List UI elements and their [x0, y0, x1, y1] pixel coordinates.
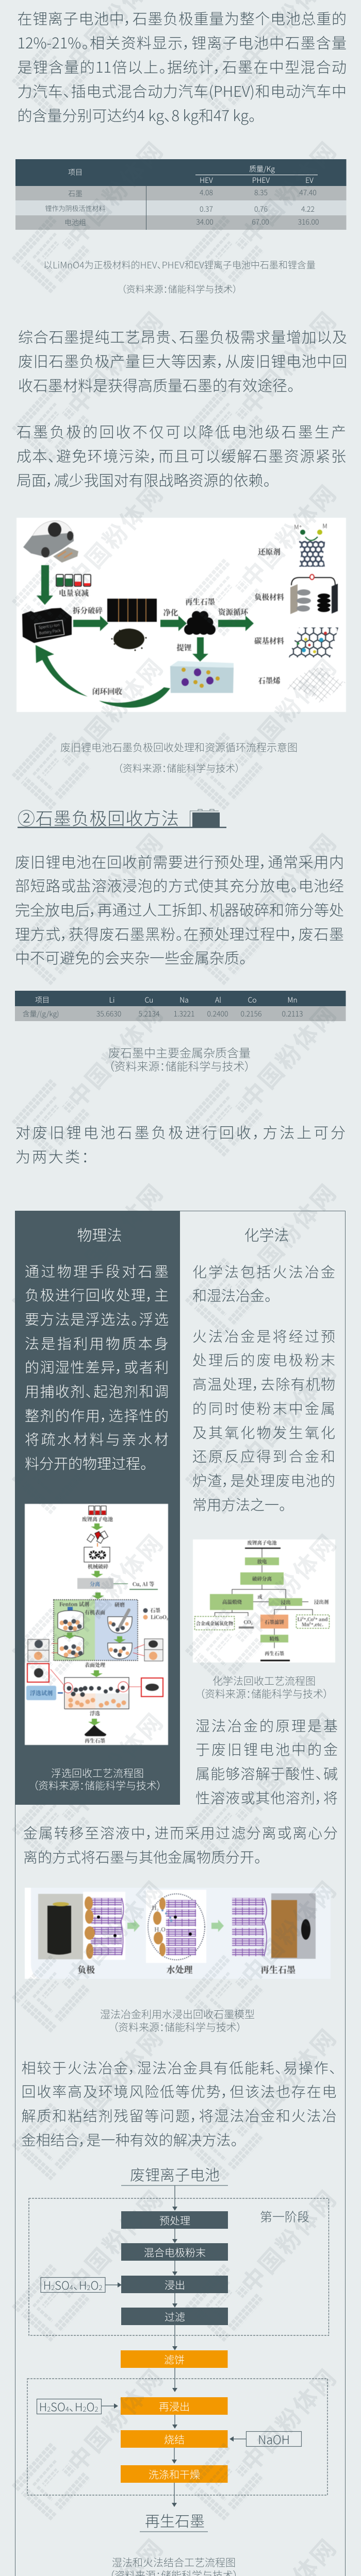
input: acid reagents: O	[90, 2277, 99, 2293]
text block: graphite content intro	[18, 7, 347, 126]
caption: table 1: （资料来源：储能科学与技术）	[122, 282, 237, 296]
step: pretreatment: 预处理	[159, 2212, 190, 2228]
diagram: regenerated graphite stacks	[232, 1898, 267, 1956]
text block: comparison of methods: 金相结合，是一种有效的解决方法。	[22, 2129, 238, 2150]
heading: physical method: 物理法	[77, 1224, 122, 1245]
input: sodium hydroxide: NaOH	[258, 2430, 290, 2448]
input: acid reagents: H	[43, 2277, 51, 2293]
arrow	[127, 1920, 140, 1932]
figure: anode recycling and resource cycle flow	[17, 518, 346, 712]
step: filter cake: 滤饼	[164, 2351, 185, 2367]
label: mechanical crushing: 机械破碎	[88, 1562, 109, 1570]
image: copper foil and graphite powder photo	[271, 1893, 316, 1959]
output: alloy	[195, 1617, 234, 1630]
text: 中国粉体网	[233, 476, 344, 594]
table: graphite and lithium mass by vehicle type: 电池组	[64, 217, 86, 228]
arrow	[92, 1592, 104, 1599]
panel: stage two	[27, 2379, 327, 2495]
legend	[143, 1606, 168, 1621]
label: reductant with icon: 还原剂	[258, 546, 281, 557]
caption: combined process figure	[109, 2554, 238, 2576]
step: flotation reagent: 浮选试剂	[30, 1689, 53, 1697]
table: graphite and lithium mass by vehicle type: 0.76	[254, 204, 268, 214]
caption: figure 1: （资料来源：储能科学与技术）	[118, 761, 240, 775]
caption: table 1	[43, 258, 316, 296]
step: flotation reagent	[26, 1686, 63, 1700]
panel: surface treatment: Fenton 试剂	[59, 1600, 89, 1607]
input: acid reagents	[41, 2277, 105, 2293]
figure: chemical recycling flow	[193, 1539, 335, 1663]
output: copper and aluminium: Cu，Al 等	[133, 1580, 154, 1588]
text: 中国粉体网	[59, 1704, 171, 1822]
text block: recycling benefits: 成本、避免环境污染，而且可以缓解石墨资源紧张	[17, 444, 346, 466]
text: 中国粉体网	[233, 302, 344, 421]
step: sintering	[121, 2430, 228, 2448]
step: re-leaching: 再浸出	[159, 2399, 190, 2413]
input: acid reagents: 2	[87, 2282, 91, 2292]
text block: comprehensive factors: 废旧石墨负极产量巨大等因素，从废旧锂电池中回	[18, 349, 347, 371]
text block: recycling benefits: 局面，减少我国对有限战略资源的依赖。	[17, 469, 271, 490]
arrow	[90, 1670, 103, 1677]
text: 中国粉体网	[59, 1872, 171, 1990]
text block: pyrometallurgy: 常用方法之一。	[192, 1494, 286, 1515]
detail: floated particle right	[129, 1678, 163, 1697]
text: 中国粉体网	[59, 1525, 171, 1643]
step: washing and drying	[121, 2465, 228, 2483]
panel: surface treatment: 有机表面	[85, 1608, 105, 1616]
input: acid reagents again: O	[86, 2398, 94, 2415]
arrow	[211, 1920, 224, 1932]
label: closed-loop recycling: 闭环回收	[92, 686, 122, 697]
diagram: water treatment	[146, 1890, 206, 1963]
output: carbon dioxide	[239, 1618, 254, 1628]
icon: spent battery pack: Spent Li-Ion	[38, 622, 60, 631]
step: spent lithium-ion battery: 废锂离子电池	[130, 2163, 220, 2185]
caption: water leaching figure: （资料来源：储能科学与技术）	[113, 2019, 242, 2034]
text block: pretreatment: 完全放电后，再通过人工拆卸、机器破碎和筛分等处	[15, 899, 344, 920]
icon: graphite pile	[85, 1725, 106, 1736]
text: 中国粉体网	[59, 1353, 171, 1472]
text: 中国粉体网	[233, 1525, 344, 1643]
step: regenerated graphite: 再生石墨	[145, 2510, 205, 2531]
label: graphene with sheet icon: 石墨烯	[258, 675, 281, 686]
table: metal impurities in spent graphite: 0.2400	[207, 1009, 228, 1019]
table: metal impurities in spent graphite: Mn	[287, 995, 298, 1005]
text: 中国粉体网	[233, 132, 344, 251]
text block: physical method description	[25, 1260, 169, 1473]
table: graphite and lithium mass by vehicle type: 67.00	[252, 217, 269, 227]
icon: heading battery and rule	[18, 809, 226, 828]
caption: flotation figure	[33, 1765, 162, 1792]
step: refining	[260, 1635, 288, 1642]
arrow: car to spent battery	[37, 565, 53, 605]
legend: LiCoO₂	[151, 1613, 168, 1621]
table: graphite and lithium mass by vehicle type: 4.08	[200, 188, 213, 198]
step: pretreatment	[121, 2211, 228, 2229]
arrow: closed loop	[36, 645, 170, 708]
arrow	[88, 1719, 101, 1725]
connectors	[102, 2185, 246, 2503]
input: acid reagents again: SO	[51, 2398, 65, 2415]
legend: 石墨	[150, 1606, 161, 1614]
text block: graphite content intro: 在锂离子电池中，石墨负极重量为整个电池总重的	[18, 7, 347, 29]
input: acid reagents again: 2	[94, 2404, 98, 2413]
text block: hydrometallurgy continued: 金属转移至溶液中，进而采用过滤分离或离心分	[23, 1822, 338, 1842]
diagram: water treatment: H₂	[152, 1904, 159, 1912]
text: 中国粉体网	[59, 2020, 171, 2138]
text block: pretreatment	[15, 850, 344, 968]
text block: hydrometallurgy principle: 湿法冶金的原理是基	[195, 1715, 338, 1735]
caption: chemical figure: 化学法回收工艺流程图	[212, 1673, 316, 1688]
label: carbon material with mesh icon: 碳基材料	[254, 636, 284, 646]
caption: table 2	[108, 1043, 251, 1074]
arrow: lithium extraction	[192, 637, 208, 662]
icon: spent batteries	[89, 1506, 106, 1515]
step: graphite filter cake: 石墨滤饼	[265, 1618, 284, 1625]
text: 中国粉体网	[59, 1175, 171, 1293]
table: graphite and lithium mass by vehicle type: PHEV	[252, 175, 270, 185]
label: flotation: 浮选	[90, 1709, 100, 1717]
text block: pyrometallurgy	[192, 1325, 335, 1515]
caption: figure 1	[60, 739, 298, 775]
text: 中国粉体网	[59, 649, 171, 768]
connectors	[215, 1548, 313, 1648]
caption: water leaching figure: 湿法冶金利用水浸出回收石墨模型	[100, 2006, 255, 2021]
input: acid reagents again: 4	[65, 2404, 69, 2413]
text block: physical method description: 的润湿性差异，或者利	[25, 1357, 169, 1377]
heading: chemical method: 化学法	[244, 1224, 289, 1245]
label: surface treatment: 表面处理	[85, 1661, 105, 1668]
text block: hydrometallurgy continued: 离的方式将石墨与其他金属物质分开。	[23, 1846, 261, 1867]
icon: spent battery pack	[22, 608, 72, 643]
arrowheads	[114, 2207, 234, 2507]
chart: combined wet and fire process flow	[27, 2163, 329, 2532]
panel: stage one	[29, 2198, 329, 2335]
input: acid reagents again: 、H	[69, 2398, 83, 2415]
table: graphite and lithium mass by vehicle type: 0.37	[200, 204, 213, 214]
table: metal impurities in spent graphite: Li	[109, 995, 114, 1005]
label: regenerated graphite: 再生石墨	[260, 1963, 296, 1975]
table: metal impurities in spent graphite: 项目	[35, 995, 50, 1005]
text block: comparison of methods: 解质和粘结剂残留等问题，将湿法冶金和火法冶	[22, 2105, 336, 2126]
table: metal impurities in spent graphite: 含量/(g/kg)	[22, 1009, 59, 1019]
icon: graphite spheres	[184, 611, 216, 635]
diagram: anode stacks	[85, 1896, 124, 1959]
text block: pretreatment: 理方式，获得废石墨黑粉。在预处理过程中，废石墨	[15, 923, 344, 944]
text block: physical method description: 通过物理手段对石墨	[25, 1260, 169, 1281]
step: crushing: 破碎分离	[252, 1575, 272, 1582]
label: leachant: 浸出剂	[314, 1598, 329, 1605]
table: graphite and lithium mass by vehicle type: 47.40	[299, 188, 317, 198]
step: washing and drying: 洗涤和干燥	[149, 2467, 200, 2481]
diagram: water treatment: H₂O	[154, 1925, 166, 1934]
text block: hydrometallurgy principle: 性溶液或其他溶剂，将	[195, 1787, 338, 1808]
text block: physical method description: 料分开的物理过程。	[25, 1453, 147, 1473]
caption: combined process figure: 湿法和火法结合工艺流程图	[112, 2554, 236, 2569]
table: graphite and lithium mass by vehicle type: 8.35	[254, 188, 268, 198]
text block: graphite content intro: 是锂含量的11倍以上。据统计，石墨在中型混合动	[18, 56, 347, 77]
step: high temperature calcination: 高温煅烧	[222, 1598, 242, 1605]
input: acid reagents: 2	[99, 2282, 102, 2292]
image: black powder	[111, 629, 146, 651]
step: crushing	[240, 1572, 284, 1585]
text: 中国粉体网	[59, 132, 171, 251]
text block: two categories	[15, 1121, 346, 1166]
step: mixed electrode powder	[121, 2243, 228, 2261]
text block: graphite content intro: 力汽车、插电式混合动力汽车(PHEV)和电动汽车中	[18, 79, 347, 101]
panel: physical method	[15, 1211, 180, 1805]
text: 中国粉体网	[233, 1353, 344, 1472]
step: filter cake	[121, 2350, 228, 2368]
text block: pyrometallurgy: 高温处理，去除有机物	[192, 1374, 335, 1394]
input: acid reagents again	[37, 2398, 101, 2415]
panel: recycling methods frame	[15, 1211, 346, 2576]
text block: pretreatment: 部短路或盐溶液浸泡的方式使其充分放电。电池经	[15, 874, 344, 896]
table: metal impurities in spent graphite: Co	[248, 995, 257, 1005]
label: stage one: 第一阶段	[260, 2207, 309, 2225]
heading: section 2: ②石墨负极回收方法	[18, 805, 179, 830]
text block: pyrometallurgy: 的同时使粉末中金属	[192, 1398, 335, 1418]
text: 中国粉体网	[233, 824, 344, 943]
text: 中国粉体网	[233, 1872, 344, 1990]
output: copper and aluminium	[113, 1580, 158, 1589]
arrow: purification	[160, 616, 187, 631]
caption: table 2: （资料来源：储能科学与技术）	[108, 1058, 251, 1074]
step: high temperature calcination	[210, 1594, 253, 1610]
input: acid reagents again: 2	[83, 2404, 87, 2413]
detail boxes	[28, 1639, 163, 1662]
text: 中国粉体网	[233, 2360, 344, 2478]
table: metal impurities in spent graphite: Cu	[145, 995, 153, 1005]
text block: comparison of methods: 回收率高及环境风险低等优势，但该法也存在电	[22, 2081, 336, 2102]
table: graphite and lithium mass by vehicle type	[15, 159, 347, 230]
label: reductant with icon	[258, 521, 327, 567]
table: metal impurities in spent graphite: 5.2134	[139, 1009, 160, 1019]
text block: hydrometallurgy principle	[195, 1715, 338, 1808]
text block: comprehensive factors	[18, 326, 347, 396]
icon: tumbling batteries	[87, 1531, 108, 1544]
text: 中国粉体网	[59, 476, 171, 594]
step: re-leaching	[121, 2397, 228, 2415]
text block: hydrometallurgy principle: 于废旧锂电池中的金	[195, 1739, 338, 1759]
text block: physical method description: 整剂的作用，选择性的	[25, 1405, 169, 1426]
image: anode photo	[38, 1892, 125, 1960]
text block: physical method description: 要方法是浮选法。浮选	[25, 1309, 169, 1329]
table: graphite and lithium mass by vehicle type: HEV	[200, 175, 213, 185]
output: metal ions: Li²⁺,Co²⁺ and	[297, 1616, 328, 1623]
image: electrode sheet	[107, 599, 157, 622]
icon: spent battery pack: Battery Pack	[39, 628, 61, 636]
table: metal impurities in spent graphite: 35.6630	[96, 1009, 121, 1019]
label: reductant with icon: M⁺	[294, 522, 302, 532]
arrow: dismantling	[73, 616, 108, 631]
label: anode material with cell icon: 负极材料	[254, 591, 284, 603]
panel: surface treatment	[54, 1600, 138, 1660]
text block: chemical method overview	[192, 1261, 335, 1306]
label: anode: 负极	[77, 1963, 95, 1975]
table: graphite and lithium mass by vehicle type: EV	[305, 175, 314, 185]
text block: graphite content intro: 的含量分别可达约4 kg、8 kg和47 kg。	[18, 104, 256, 126]
label: regenerated graphite: 再生石墨	[185, 597, 215, 607]
caption: chemical figure	[200, 1673, 329, 1701]
detail: floated particle left	[27, 1664, 64, 1686]
arrow	[91, 1523, 103, 1530]
text block: comprehensive factors: 综合石墨提纯工艺昂贵、石墨负极需求量增加以及	[18, 326, 347, 347]
step: discharge: 放电	[257, 1558, 267, 1565]
table: metal impurities in spent graphite: Al	[215, 995, 221, 1005]
text block: graphite content intro: 12%-21%。相关资料显示，锂离子电池中石墨含量	[18, 31, 347, 53]
step: refining: 精炼	[269, 1635, 280, 1642]
label: resource cycle: 资源循环	[218, 607, 249, 617]
table: graphite and lithium mass by vehicle type: 石墨	[68, 189, 83, 199]
text block: comprehensive factors: 收石墨材料是获得高质量石墨的有效途径。	[18, 374, 295, 396]
caption: water leaching figure	[100, 2006, 255, 2034]
text block: recycling benefits: 石墨负极的回收不仅可以降低电池级石墨生产	[17, 420, 346, 442]
text: 中国粉体网	[59, 2181, 171, 2299]
step: filtration: 过滤	[165, 2309, 185, 2324]
arrow	[91, 1571, 103, 1578]
table: metal impurities in spent graphite: 1.3221	[174, 1009, 194, 1019]
text: 中国粉体网	[59, 302, 171, 421]
text block: pyrometallurgy: 炉渣，是处理废电池的	[192, 1470, 335, 1490]
step: sintering: 烧结	[164, 2432, 185, 2446]
text block: hydrometallurgy continued	[23, 1822, 338, 1867]
table: metal impurities in spent graphite: Na	[179, 995, 189, 1005]
arrow: resource cycle	[218, 616, 254, 631]
text: 中国粉体网	[233, 1175, 344, 1293]
step: filtration	[121, 2308, 228, 2325]
text block: pretreatment: 中不可避免的会夹杂一些金属杂质。	[15, 946, 247, 968]
text block: two categories: 对废旧锂电池石墨负极进行回收，方法上可分	[15, 1121, 346, 1143]
step: leaching: 浸出	[281, 1598, 291, 1605]
step: graphite filter cake	[260, 1615, 288, 1629]
output: alloy: 合金或金属氧化物	[196, 1620, 233, 1627]
figure: flotation recycling flow	[24, 1503, 169, 1745]
text block: physical method description: 将疏水材料与亲水材	[25, 1429, 169, 1449]
icon: electric car with battery pack	[23, 521, 78, 563]
text: 中国粉体网	[233, 2020, 344, 2138]
label: lithium extraction: 提锂	[176, 642, 192, 653]
caption: flotation figure: （资料来源：储能科学与技术）	[33, 1777, 162, 1792]
label: spent lithium-ion batteries: 废锂离子电池	[82, 1515, 113, 1523]
step: leaching	[121, 2276, 228, 2293]
caption: chemical figure: （资料来源：储能科学与技术）	[200, 1686, 329, 1701]
text block: physical method description: 用捕收剂、起泡剂和调	[25, 1381, 169, 1401]
text block: pyrometallurgy: 火法冶金是将经过预	[192, 1325, 335, 1346]
caption: table 1: 以LiMnO4为正极材料的HEV、PHEV和EV锂离子电池中石墨和锂含量	[43, 258, 316, 272]
text block: pyrometallurgy: 及其氧化物发生氧化	[192, 1422, 335, 1443]
label: reductant with icon: M	[322, 521, 327, 531]
text block: pretreatment: 废旧锂电池在回收前需要进行预处理，通常采用内	[15, 850, 344, 872]
text block: comparison of methods: 相较于火法冶金，湿法冶金具有低能耗、易操作、	[22, 2057, 336, 2077]
input: sodium hydroxide	[247, 2430, 301, 2448]
label: carbon material with mesh icon	[254, 628, 338, 657]
input: acid reagents: 4	[70, 2282, 73, 2292]
text block: hydrometallurgy principle: 属能够溶解于酸性、碱	[195, 1763, 338, 1784]
caption: figure 1: 废旧锂电池石墨负极回收处理和资源循环流程示意图	[60, 739, 298, 754]
figure: water leaching graphite recovery model	[25, 1888, 330, 1979]
text block: recycling benefits	[17, 420, 346, 490]
table: metal impurities in spent graphite: 0.2156	[241, 1009, 261, 1019]
step: mixed electrode powder: 混合电极粉末	[144, 2244, 206, 2260]
table: graphite and lithium mass by vehicle type: 质量/Kg	[249, 164, 275, 174]
label: water treatment: 水处理	[166, 1963, 193, 1975]
text: 中国粉体网	[59, 996, 171, 1114]
label: anode material with cell icon	[254, 574, 338, 614]
label: regenerated graphite: 再生石墨	[85, 1736, 106, 1744]
icon: crusher with gears	[84, 1547, 110, 1562]
label: dismantling: 拆分破碎	[73, 605, 103, 616]
icon: capacity fade batteries	[56, 574, 91, 586]
text block: two categories: 为两大类：	[15, 1145, 91, 1166]
panel: flotation tank	[63, 1677, 129, 1709]
text block: chemical method overview: 化学法包括火法冶金	[192, 1261, 335, 1282]
step: separation: 分离	[90, 1580, 100, 1588]
caption: table 2: 废石墨中主要金属杂质含量	[108, 1043, 251, 1061]
text: 中国粉体网	[233, 2181, 344, 2299]
text block: chemical method overview: 和湿法冶金。	[192, 1285, 272, 1306]
input: acid reagents: SO	[55, 2277, 70, 2293]
input: acid reagents again: H	[39, 2398, 47, 2415]
output: carbon dioxide: CO₂	[244, 1618, 253, 1625]
input: acid reagents again: 2	[47, 2404, 51, 2413]
input: acid reagents: 2	[51, 2282, 55, 2292]
input: acid reagents: 、H	[73, 2277, 87, 2293]
label: purification: 净化	[163, 607, 178, 618]
output: metal ions: Mn²⁺,etc.	[302, 1621, 323, 1628]
text block: pyrometallurgy: 处理后的废电极粉末	[192, 1349, 335, 1370]
table: graphite and lithium mass by vehicle type: 项目	[68, 167, 83, 177]
step: separation	[77, 1578, 113, 1589]
text: 中国粉体网	[59, 824, 171, 943]
table: metal impurities in spent graphite	[15, 991, 346, 1021]
step: leaching	[269, 1598, 302, 1606]
label: regenerated graphite: 再生石墨	[265, 1650, 284, 1657]
text block: physical method description: 法是指利用物质本身	[25, 1333, 169, 1353]
label: capacity fade: 电量衰减	[59, 587, 89, 599]
table: graphite and lithium mass by vehicle type: 锂作为阴极活性材料	[45, 203, 106, 213]
text block: pyrometallurgy: 还原反应得到合金和	[192, 1446, 335, 1466]
text: 中国粉体网	[59, 2360, 171, 2478]
text: 中国粉体网	[233, 996, 344, 1114]
output: metal ions	[296, 1615, 329, 1628]
text block: physical method description: 负极进行回收处理，主	[25, 1284, 169, 1305]
image: lithium solution box	[170, 661, 234, 693]
table: metal impurities in spent graphite: 0.2113	[282, 1009, 303, 1019]
text: 中国粉体网	[233, 1704, 344, 1822]
step: leaching: 浸出	[165, 2277, 185, 2292]
step: discharge	[245, 1557, 279, 1565]
panel: surface treatment: 研磨	[114, 1600, 125, 1608]
text: 中国粉体网	[233, 649, 344, 768]
caption: flotation figure: 浮选回收工艺流程图	[51, 1765, 144, 1780]
text block: comparison of methods	[22, 2057, 336, 2150]
table: graphite and lithium mass by vehicle type: 4.22	[301, 204, 315, 214]
label: or: 或	[257, 1593, 262, 1600]
label: graphene with sheet icon	[258, 668, 346, 704]
table: graphite and lithium mass by vehicle type: 316.00	[298, 217, 319, 227]
table: graphite and lithium mass by vehicle type: 34.00	[196, 217, 214, 227]
